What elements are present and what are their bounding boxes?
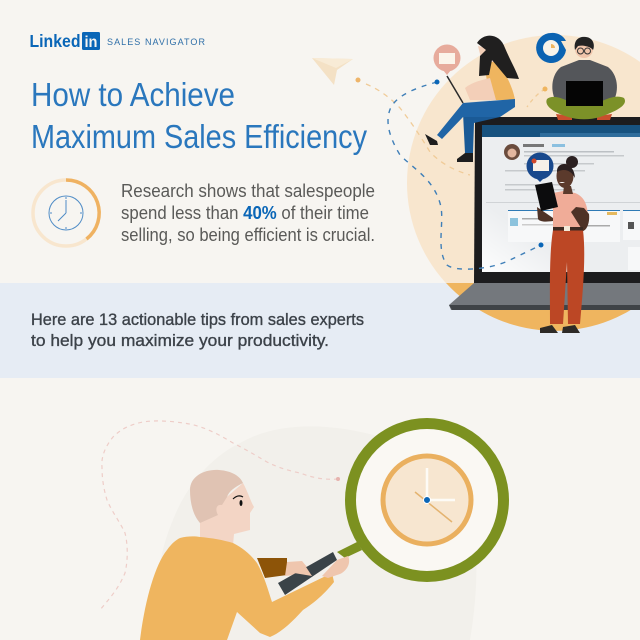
dashed path: paper plane to laptop xyxy=(356,78,545,175)
title: Maximum Sales Efficiency xyxy=(31,118,367,155)
dashed path: envelope to tablet woman xyxy=(388,82,541,269)
text block: 13 tips xyxy=(31,310,364,350)
text block: 13 tips: to help you maximize your productivity. xyxy=(31,331,329,350)
title: How to Achieve xyxy=(31,76,235,113)
background circle: hero xyxy=(407,35,640,331)
background blob: lower xyxy=(158,426,476,640)
icon: envelope bubble xyxy=(434,44,460,75)
dot: path accent xyxy=(542,86,548,92)
text block: research xyxy=(121,181,375,245)
person: woman with laptop xyxy=(425,36,519,162)
logo: LinkedIn Sales Navigator: SALES NAVIGATOR xyxy=(107,37,206,47)
icon: paper plane xyxy=(312,58,353,85)
icon: message bubble xyxy=(526,152,554,182)
dot: tablet path xyxy=(538,242,544,248)
person: man with magnifying glass xyxy=(140,470,362,640)
text block: research: Research shows that salespeople xyxy=(121,181,375,201)
person: woman with tablet xyxy=(535,156,589,333)
magnifying glass with clock xyxy=(350,424,504,576)
logo: LinkedIn Sales Navigator: Linked xyxy=(30,31,80,51)
clock graphic: 40 percent ring xyxy=(33,180,99,246)
icon: chart bubble xyxy=(536,33,566,63)
dashed path: lower xyxy=(100,421,340,610)
title xyxy=(31,76,367,155)
text block: 13 tips: Here are 13 actionable tips from sales experts xyxy=(31,310,364,329)
band: intro xyxy=(0,283,640,378)
person: man with laptop xyxy=(546,37,625,120)
logo: LinkedIn Sales Navigator: in xyxy=(84,34,98,51)
logo: LinkedIn Sales Navigator xyxy=(30,31,206,51)
text block: research: spend less than 40% of their time xyxy=(121,203,369,223)
laptop xyxy=(449,117,640,310)
dot: envelope path xyxy=(434,80,440,84)
screen: profile xyxy=(486,144,640,270)
text block: research: selling, so being efficient is crucial. xyxy=(121,225,375,245)
